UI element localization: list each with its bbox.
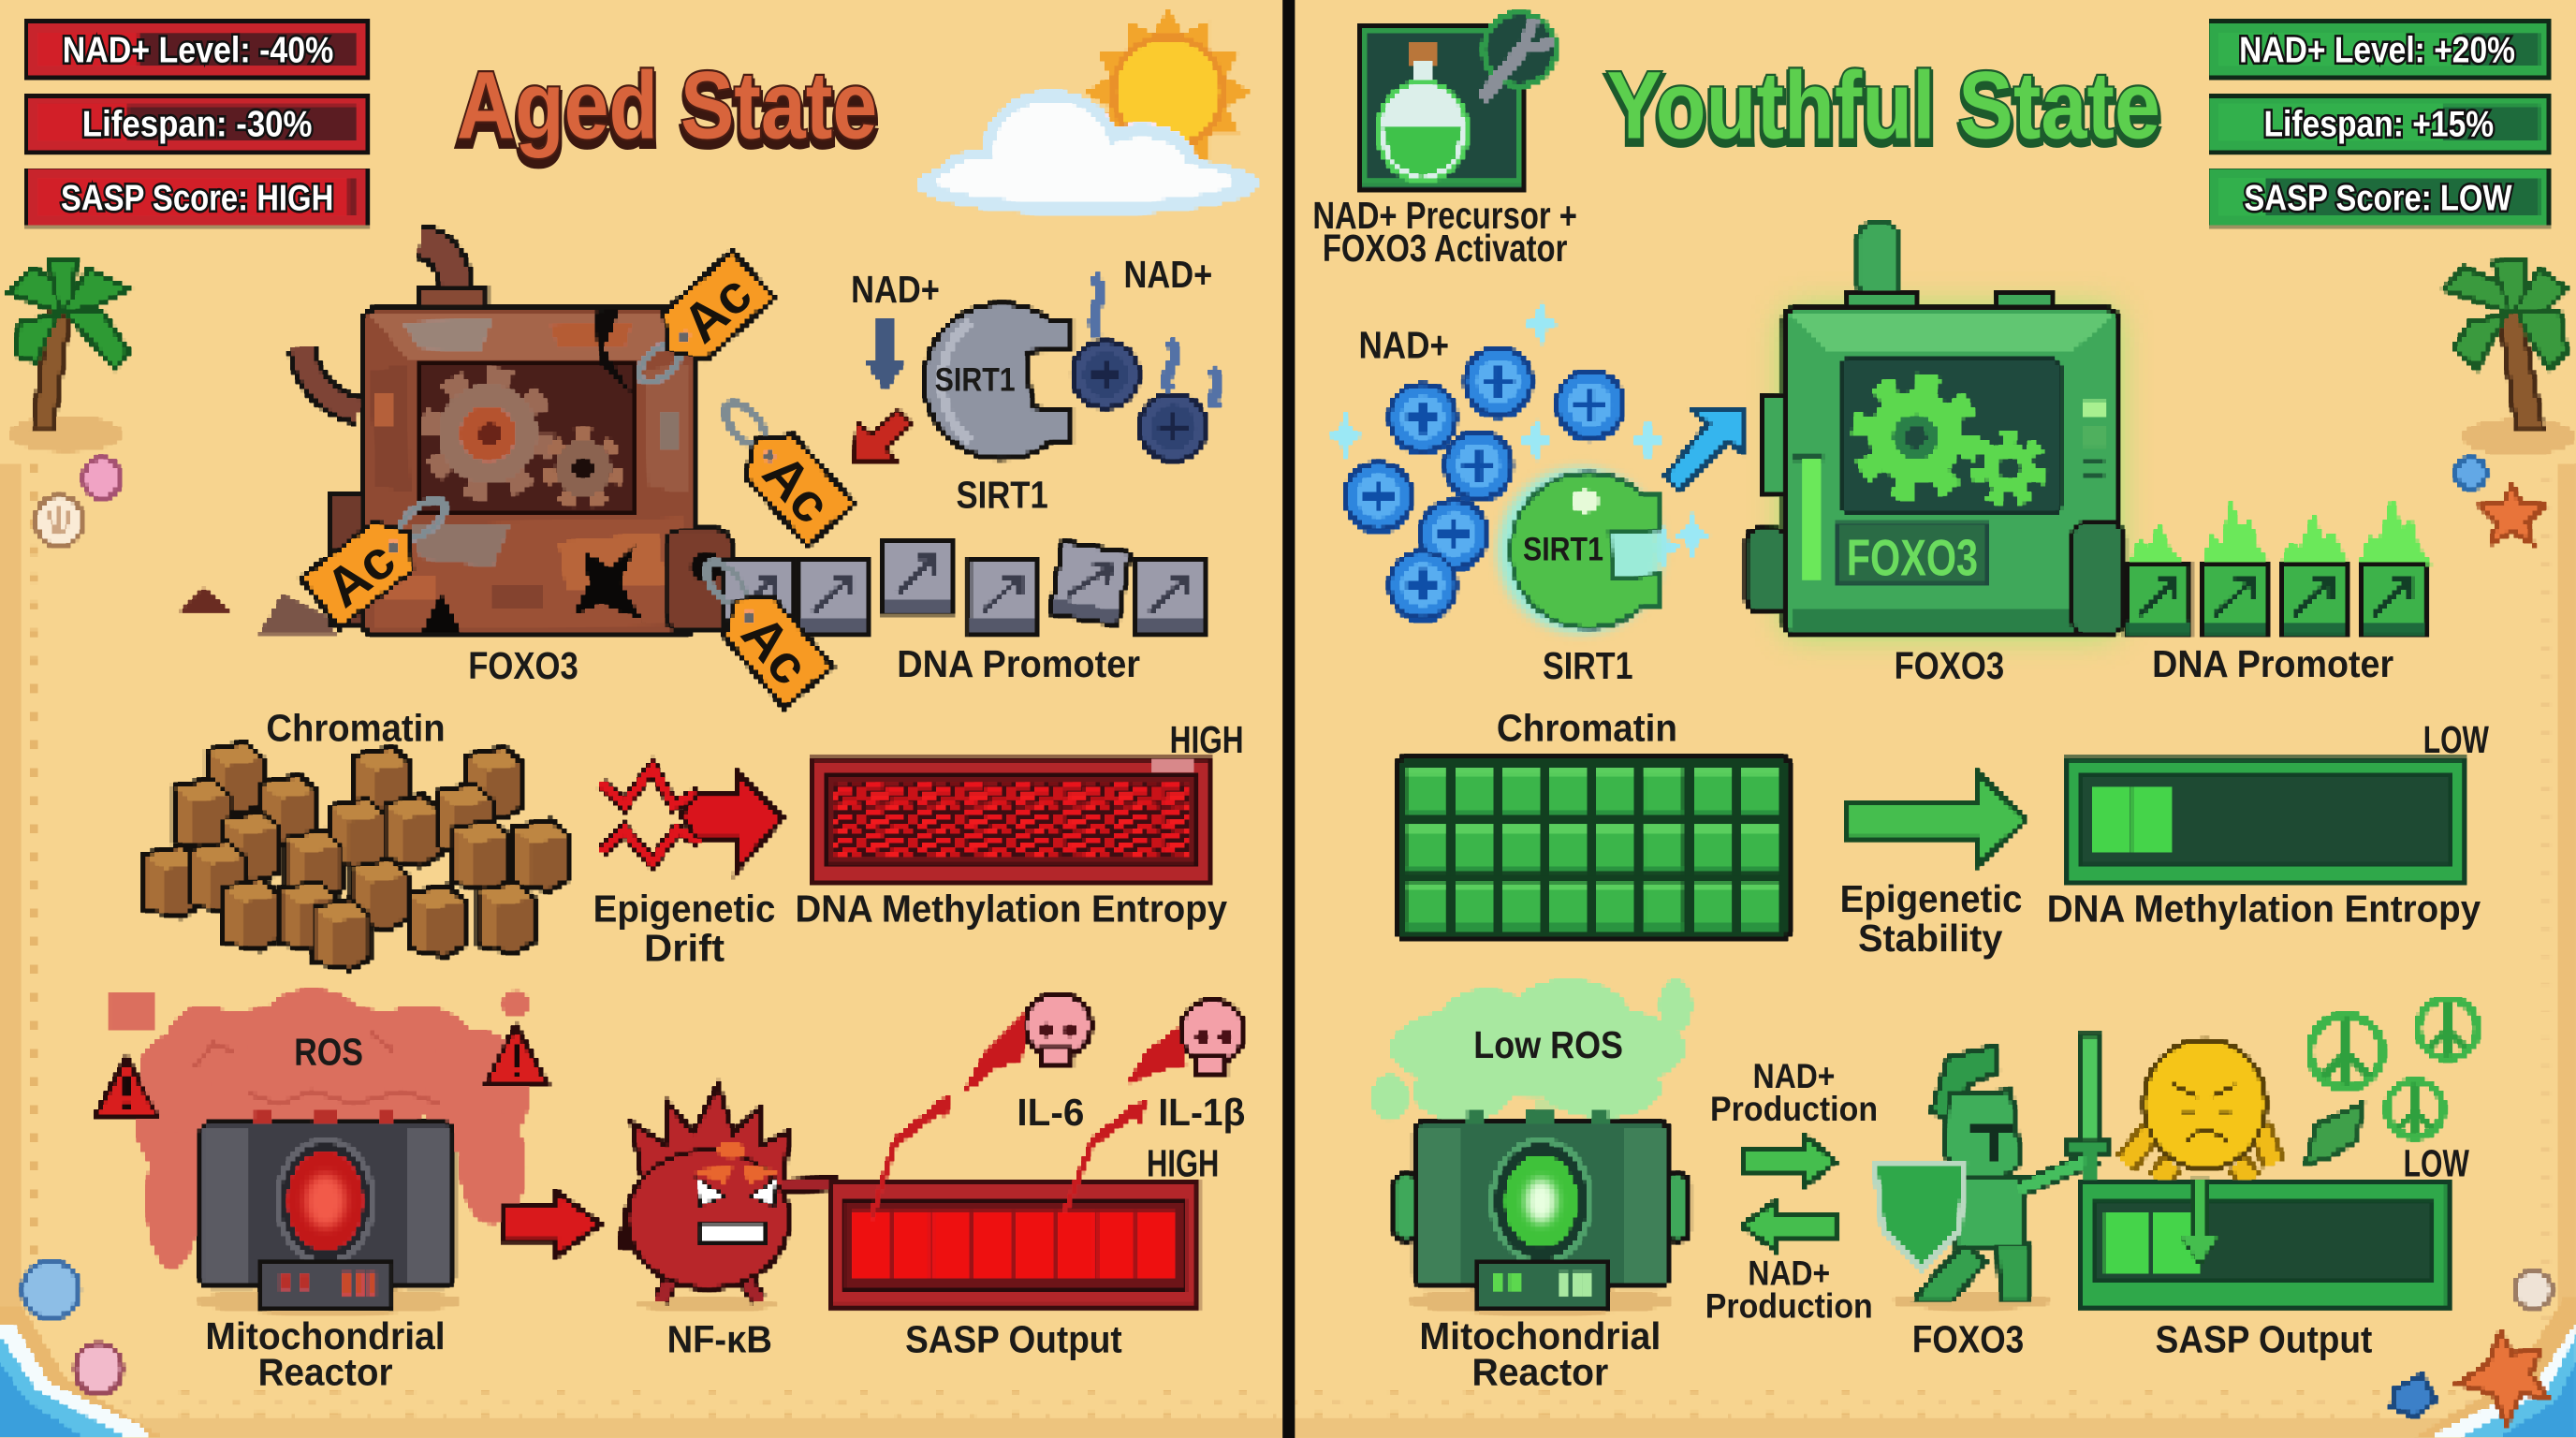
rusted FOXO3 machine (181, 242, 731, 634)
label: NF-kB: NF-κB (667, 1317, 772, 1360)
label: LOW entropy: LOW (2423, 718, 2490, 761)
icon: skull IL-6 (963, 994, 1090, 1093)
label: DNA Methylation Entropy: DNA Methylation Entropy (2047, 888, 2481, 931)
stat text: NAD+ level: NAD+ Level: +20% (2239, 31, 2515, 71)
mitochondrial reactor (youthful) (1395, 1109, 1689, 1314)
icon: blue gem (2392, 1375, 2435, 1416)
stat text: lifespan: Lifespan: -30% (82, 105, 313, 145)
label: NAD+ Production top: Production (1710, 1090, 1878, 1128)
arrows: SASP to cytokines (871, 1094, 1147, 1219)
label: NAD+ Precursor + FOXO3 Activator (1312, 194, 1577, 270)
stat text: SASP score: SASP Score: HIGH (61, 179, 333, 219)
label: NAD+ Production bottom (1705, 1254, 1873, 1326)
icon: cream shell (37, 496, 82, 546)
icon: palm tree left (10, 259, 128, 452)
arrow: reactor to NF-kB (503, 1193, 600, 1255)
label: HIGH SASP: HIGH (1147, 1142, 1219, 1185)
icon: warning triangle right (485, 1027, 547, 1084)
stat text: lifespan: Lifespan: +15% (2263, 105, 2494, 145)
label: ROS: ROS (294, 1030, 363, 1073)
stat text: NAD+ level: NAD+ Level: -40% (63, 31, 333, 71)
arrow: red down-left (855, 411, 912, 462)
label: Epigenetic Stability: Epigenetic (1840, 877, 2022, 920)
stat text: SASP score: SASP Score: LOW (2244, 179, 2512, 219)
acetyl tag 2 (702, 387, 854, 546)
low ROS cloud (1372, 979, 1692, 1123)
label: NAD+ Production top: NAD+ (1753, 1057, 1835, 1095)
mitochondrial reactor (aged) (198, 1109, 460, 1314)
icon: peace symbol 2 (2418, 999, 2478, 1058)
yellow senescent blob (2126, 1040, 2274, 1180)
FOXO3 knight (1875, 1035, 2110, 1310)
icon: palm tree right (2445, 259, 2574, 455)
label: Mitochondrial Reactor: Reactor (258, 1350, 393, 1393)
title: Aged State: Aged State (457, 51, 877, 158)
icon: cream shell right (2515, 1271, 2552, 1308)
arrow: epigenetic drift (601, 768, 782, 871)
icon: NAD+ precursor potion (1358, 13, 1556, 189)
label: Epigenetic Drift (593, 888, 775, 970)
tag text 1: Ac (672, 264, 764, 355)
stat bar: NAD+ level (2208, 20, 2550, 79)
SIRT1 grey enzyme (925, 304, 1071, 459)
FOXO3 green machine (1747, 224, 2124, 634)
NF-kB monster (624, 1086, 838, 1312)
arrow: production left (1743, 1203, 1835, 1249)
icon: starfish right (2481, 486, 2543, 542)
label: IL-6: IL-6 (1017, 1091, 1084, 1134)
title: Youthful State: Youthful State (1606, 51, 2160, 158)
label: NAD+ Production bottom: Production (1705, 1287, 1873, 1326)
label: Epigenetic Drift: Drift (644, 927, 724, 970)
icon: starfish bottom right (2459, 1332, 2546, 1423)
arrow: epigenetic stability (1848, 772, 2026, 866)
icon: peace symbol 3 (2387, 1081, 2443, 1137)
arrow: NAD+ down (866, 318, 905, 391)
SASP output bar (aged) (829, 1183, 1197, 1306)
ROS cloud (110, 990, 529, 1269)
title: Aged State: Aged State (457, 58, 877, 165)
NAD+ coins abundant (1327, 301, 1710, 623)
arrow: SIRT1 activates FOXO3 (1666, 409, 1743, 490)
SIRT1 green enzyme (1499, 468, 1662, 633)
label: DNA Promoter: DNA Promoter (2152, 642, 2393, 685)
label: DNA Methylation Entropy: DNA Methylation Entropy (795, 888, 1228, 931)
label: Mitochondrial Reactor: Reactor (1472, 1350, 1609, 1393)
label: NAD+ Production top (1710, 1057, 1878, 1128)
arrow: production right (1743, 1136, 1835, 1186)
label: Mitochondrial Reactor (205, 1314, 446, 1393)
stat bar: SASP score (26, 168, 368, 227)
label: LOW SASP: LOW (2404, 1142, 2470, 1185)
NAD+ coins depleted (1073, 276, 1217, 460)
stat bar: lifespan (2208, 94, 2550, 153)
tag text 4: Ac (730, 605, 820, 697)
SASP output bar (youthful) (2080, 1180, 2448, 1306)
panel: Youthful State (1312, 13, 2574, 1423)
icon: pink shell (84, 459, 120, 498)
youthful text layer (1312, 31, 2515, 1393)
DNA promoter tiles (aged) (724, 540, 1204, 633)
label: Mitochondrial Reactor (1419, 1314, 1661, 1393)
enzyme text: SIRT1: SIRT1 (935, 362, 1016, 399)
icon: blue shell right (2456, 459, 2485, 488)
DNA promoter tiles (youthful) (2126, 564, 2424, 636)
NAD+ label: NAD+ (1358, 324, 1449, 367)
label: IL-1 beta: IL-1β (1158, 1091, 1245, 1134)
label: DNA Promoter: DNA Promoter (897, 642, 1140, 685)
label: SIRT1: SIRT1 (1543, 644, 1633, 687)
label: FOXO3: FOXO3 (1912, 1317, 2024, 1360)
acetyl tag 4 (682, 546, 832, 707)
stat bar: SASP score (2208, 168, 2550, 227)
icon: skull IL-1 beta (1127, 1001, 1244, 1084)
entropy bar (youthful) (2069, 759, 2463, 882)
label: Mitochondrial Reactor: Mitochondrial (205, 1314, 446, 1357)
label: Epigenetic Stability (1840, 877, 2022, 960)
label: NAD+ right: NAD+ (1123, 253, 1212, 296)
entropy bar (aged) (813, 759, 1211, 882)
label: SIRT1: SIRT1 (956, 473, 1048, 516)
label: SASP Output: SASP Output (905, 1317, 1122, 1360)
label: FOXO3: FOXO3 (468, 644, 578, 687)
acetyl tag 3 (301, 481, 464, 627)
label: HIGH entropy: HIGH (1170, 718, 1244, 761)
chromatin scattered cubes (145, 742, 568, 969)
youthful artwork layer (1327, 13, 2574, 1423)
green flames (2130, 496, 2431, 565)
label: Mitochondrial Reactor: Mitochondrial (1419, 1314, 1661, 1357)
stat bar: NAD+ level (26, 20, 368, 79)
title: Youthful State: Youthful State (1606, 57, 2160, 164)
aged artwork layer (10, 10, 1258, 1393)
label: Epigenetic Drift: Epigenetic (593, 888, 775, 931)
panel: Aged State (10, 10, 1258, 1393)
aged text layer (61, 31, 1245, 1393)
icon: sun behind cloud (916, 10, 1258, 215)
chromatin ordered grid (1398, 757, 1789, 938)
FOXO3 plate text: FOXO3 (1847, 529, 1978, 586)
label: NAD+ Precursor + FOXO3 Activator: FOXO3 Activator (1323, 227, 1568, 270)
tag text 3: Ac (315, 529, 406, 619)
label: Chromatin: Chromatin (1497, 707, 1677, 750)
icon: warning triangle left (95, 1058, 158, 1117)
icon: pink shell bottom (76, 1344, 122, 1393)
tag text 2: Ac (751, 444, 842, 535)
label: NAD+ Precursor + FOXO3 Activator: NAD+ Precursor + (1312, 194, 1577, 237)
label: NAD+ Production bottom: NAD+ (1748, 1254, 1830, 1292)
central divider (1282, 0, 1295, 1438)
icon: peace symbol 1 (2310, 1016, 2382, 1088)
enzyme text: SIRT1: SIRT1 (1523, 531, 1603, 567)
label: Epigenetic Stability: Stability (1858, 917, 2003, 960)
icon: blue shell (23, 1262, 79, 1318)
label: Chromatin: Chromatin (266, 707, 446, 750)
stat bar: lifespan (26, 94, 368, 153)
label: Low ROS: Low ROS (1473, 1023, 1623, 1066)
label: NAD+ left: NAD+ (851, 268, 940, 311)
acetyl tag 1 (619, 252, 774, 401)
icon: leaf (2306, 1104, 2363, 1164)
label: FOXO3: FOXO3 (1895, 644, 2004, 687)
label: SASP Output: SASP Output (2156, 1317, 2372, 1360)
